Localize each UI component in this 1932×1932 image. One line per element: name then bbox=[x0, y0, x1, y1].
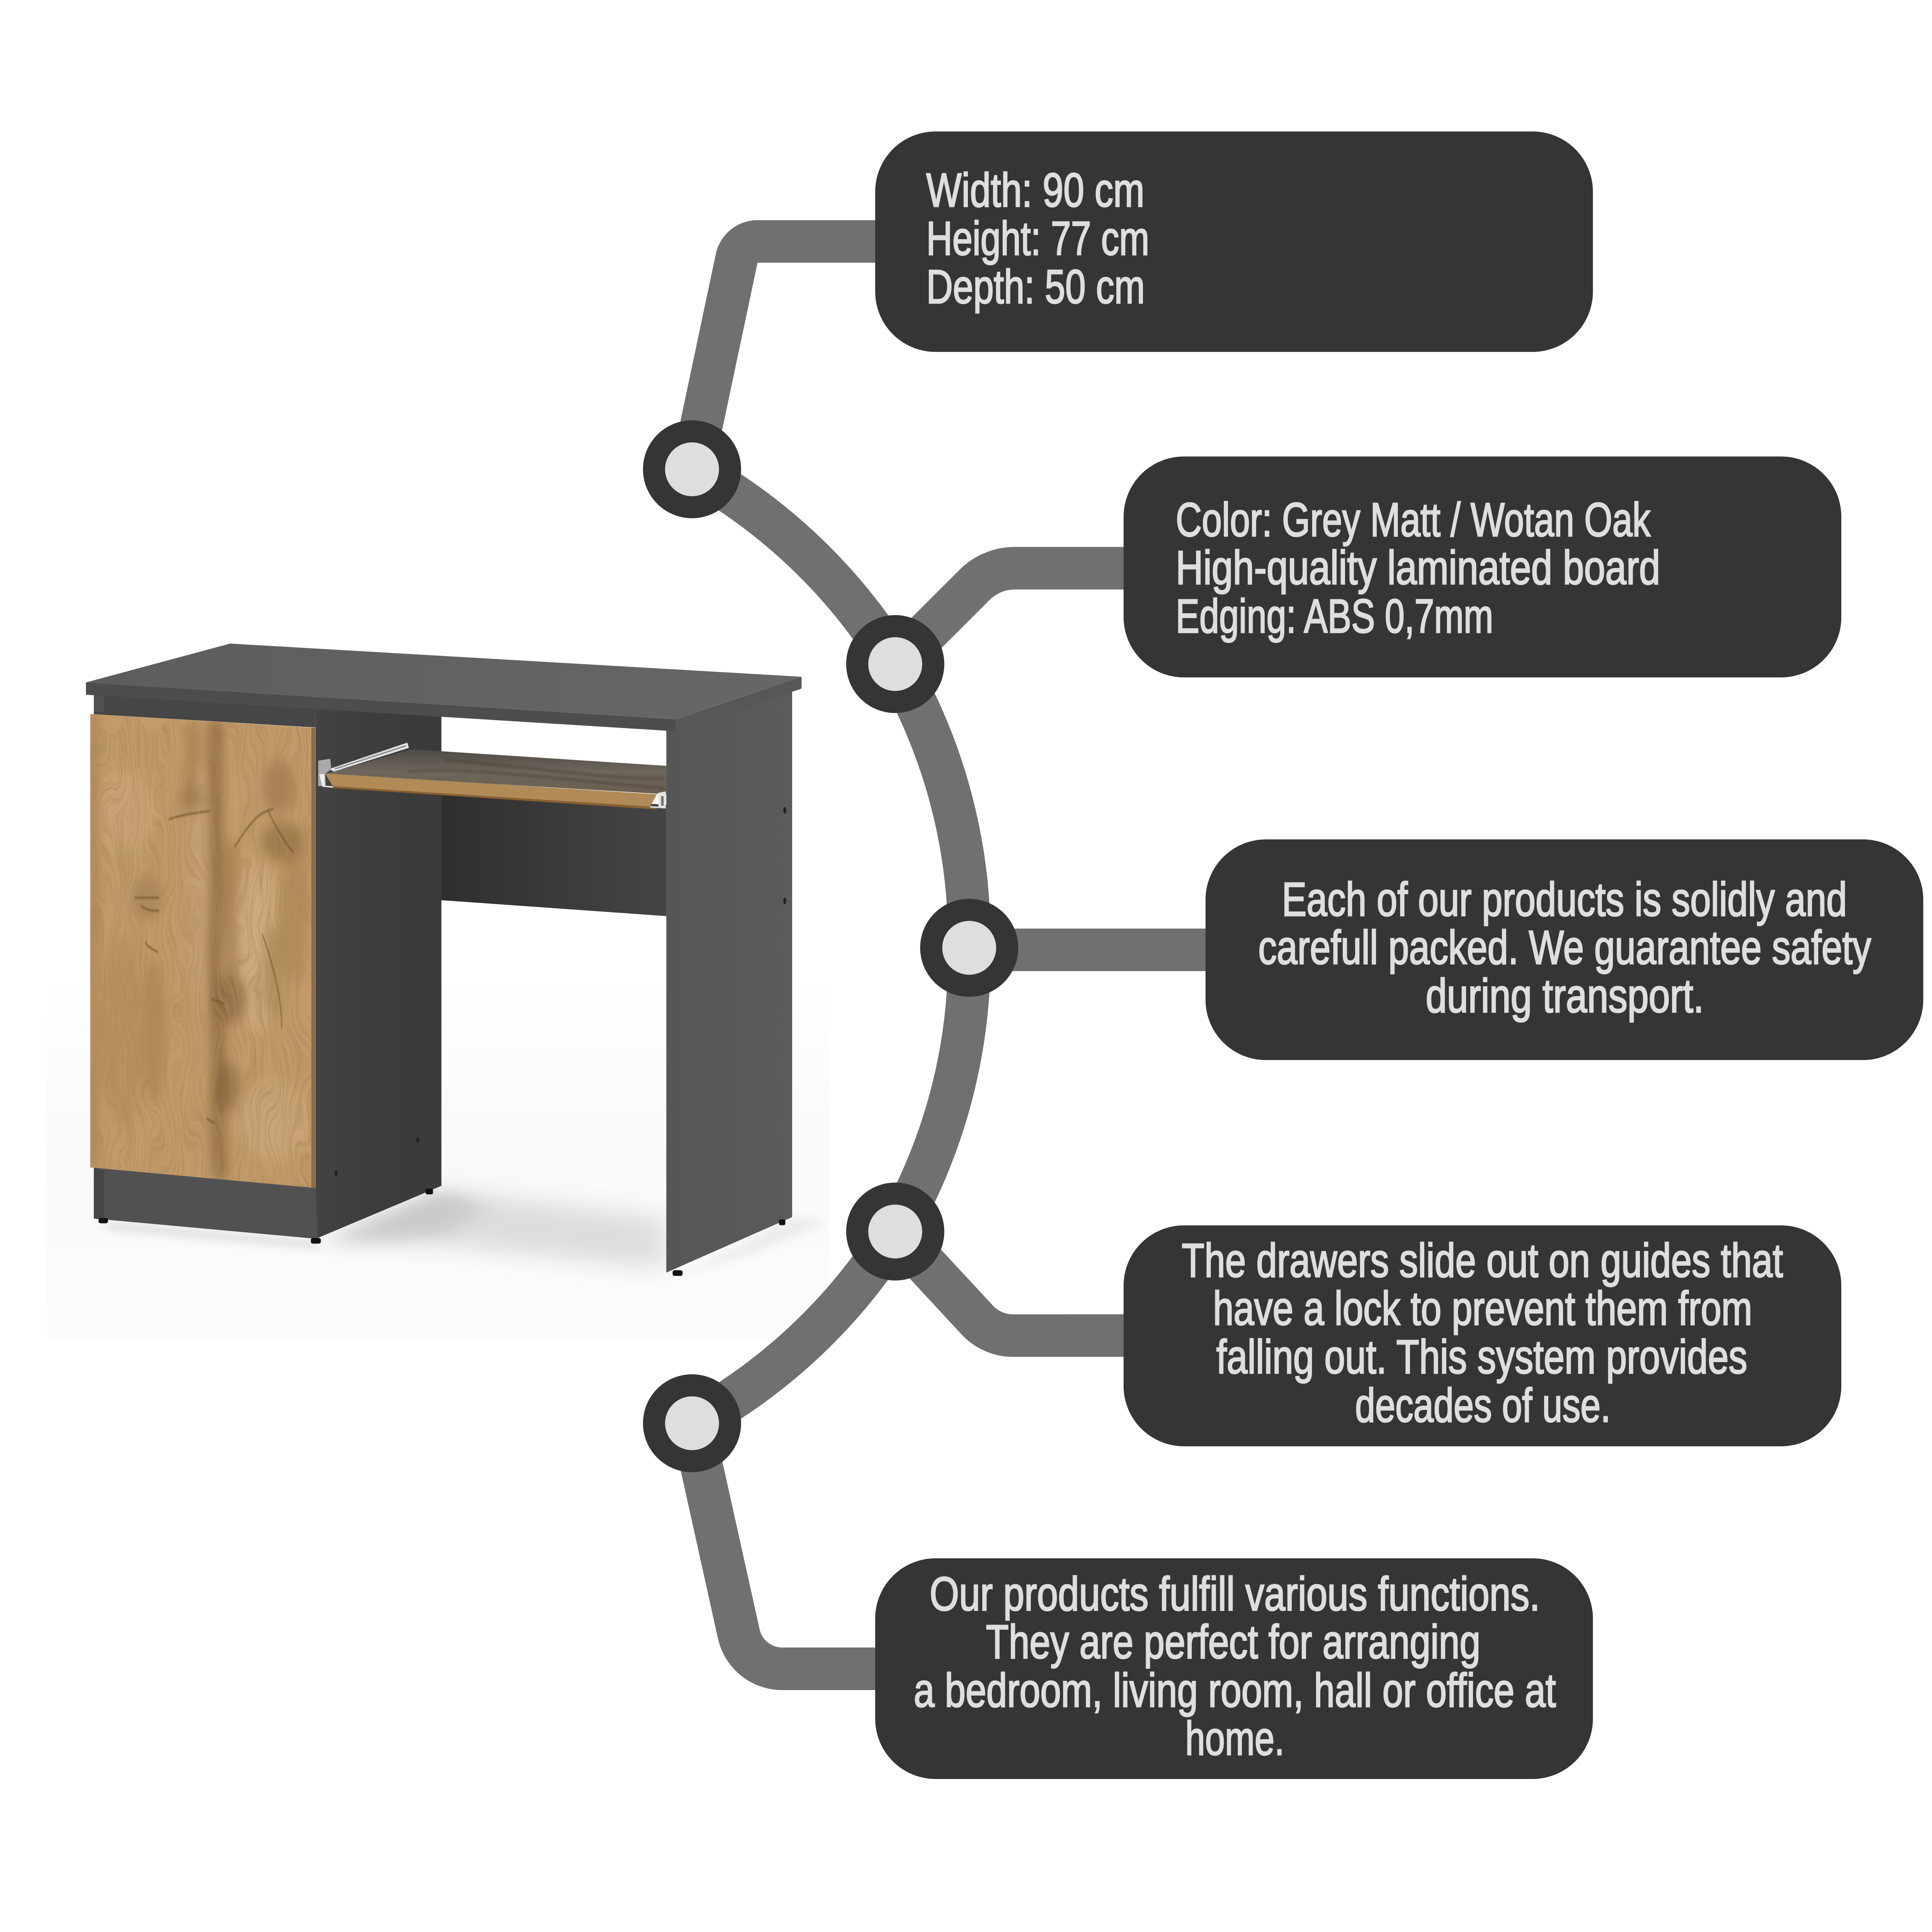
tray rails and brackets bbox=[318, 743, 666, 808]
connector to material box bbox=[895, 568, 1135, 664]
product photo: desk bbox=[86, 644, 825, 1280]
panel: dimensions bbox=[875, 131, 1593, 352]
panel: drawer guides: The drawers slide out on guides that bbox=[1182, 1234, 1783, 1287]
panel: functions: a bedroom, living room, hall or office at bbox=[914, 1664, 1556, 1717]
panel: functions: Our products fulfill various functions. bbox=[930, 1568, 1540, 1621]
rear modesty panel bbox=[432, 791, 666, 916]
keyboard tray bbox=[325, 749, 666, 810]
screw holes bbox=[335, 807, 786, 1177]
floor shadow bbox=[99, 1190, 828, 1276]
connector to drawers box bbox=[895, 1231, 1135, 1335]
photo floor background bbox=[47, 974, 830, 1338]
cabinet front strip above door bbox=[94, 693, 316, 728]
oak door bbox=[90, 711, 316, 1192]
panel: drawer guides bbox=[1124, 1225, 1841, 1446]
opening above the tray bbox=[442, 716, 666, 766]
desk illustration bbox=[86, 644, 828, 1276]
panel: drawer guides: falling out. This system provides bbox=[1216, 1330, 1747, 1384]
panel: dimensions: Depth: 50 cm bbox=[926, 260, 1145, 314]
panel: colour and material: Color: Grey Matt / Wotan Oak bbox=[1176, 493, 1651, 547]
panel: functions: home. bbox=[1185, 1712, 1284, 1765]
node 1 bbox=[643, 420, 741, 518]
connector to dimensions box bbox=[692, 242, 886, 469]
panel: colour and material: Edging: ABS 0,7mm bbox=[1176, 590, 1493, 643]
cabinet plinth bbox=[94, 1167, 318, 1239]
panel: colour and material: High-quality laminated board bbox=[1176, 541, 1660, 595]
right side leg panel bbox=[666, 691, 792, 1272]
panel: colour and material bbox=[1124, 456, 1841, 677]
panel: packaging: during transport. bbox=[1426, 969, 1704, 1022]
connector to functions box bbox=[692, 1423, 886, 1669]
panel: drawer guides: have a lock to prevent them from bbox=[1213, 1282, 1752, 1335]
desktop board bbox=[86, 644, 801, 731]
connector to packaging box bbox=[969, 918, 1215, 982]
panel: dimensions: Height: 77 cm bbox=[926, 212, 1149, 265]
node 5 bbox=[643, 1374, 741, 1472]
panel: functions bbox=[875, 1558, 1593, 1779]
panel: dimensions: Width: 90 cm bbox=[926, 164, 1145, 217]
node 4 bbox=[846, 1182, 944, 1281]
node 2 bbox=[846, 615, 944, 713]
cabinet side panel bbox=[316, 707, 441, 1239]
desk feet bbox=[99, 1189, 785, 1276]
panel: drawer guides: decades of use. bbox=[1355, 1379, 1611, 1432]
node 3 bbox=[920, 899, 1018, 997]
panel: functions: They are perfect for arranging bbox=[986, 1616, 1480, 1669]
connector network bbox=[692, 242, 1215, 1669]
panel: packaging bbox=[1206, 839, 1923, 1060]
main arc bbox=[692, 469, 969, 1423]
